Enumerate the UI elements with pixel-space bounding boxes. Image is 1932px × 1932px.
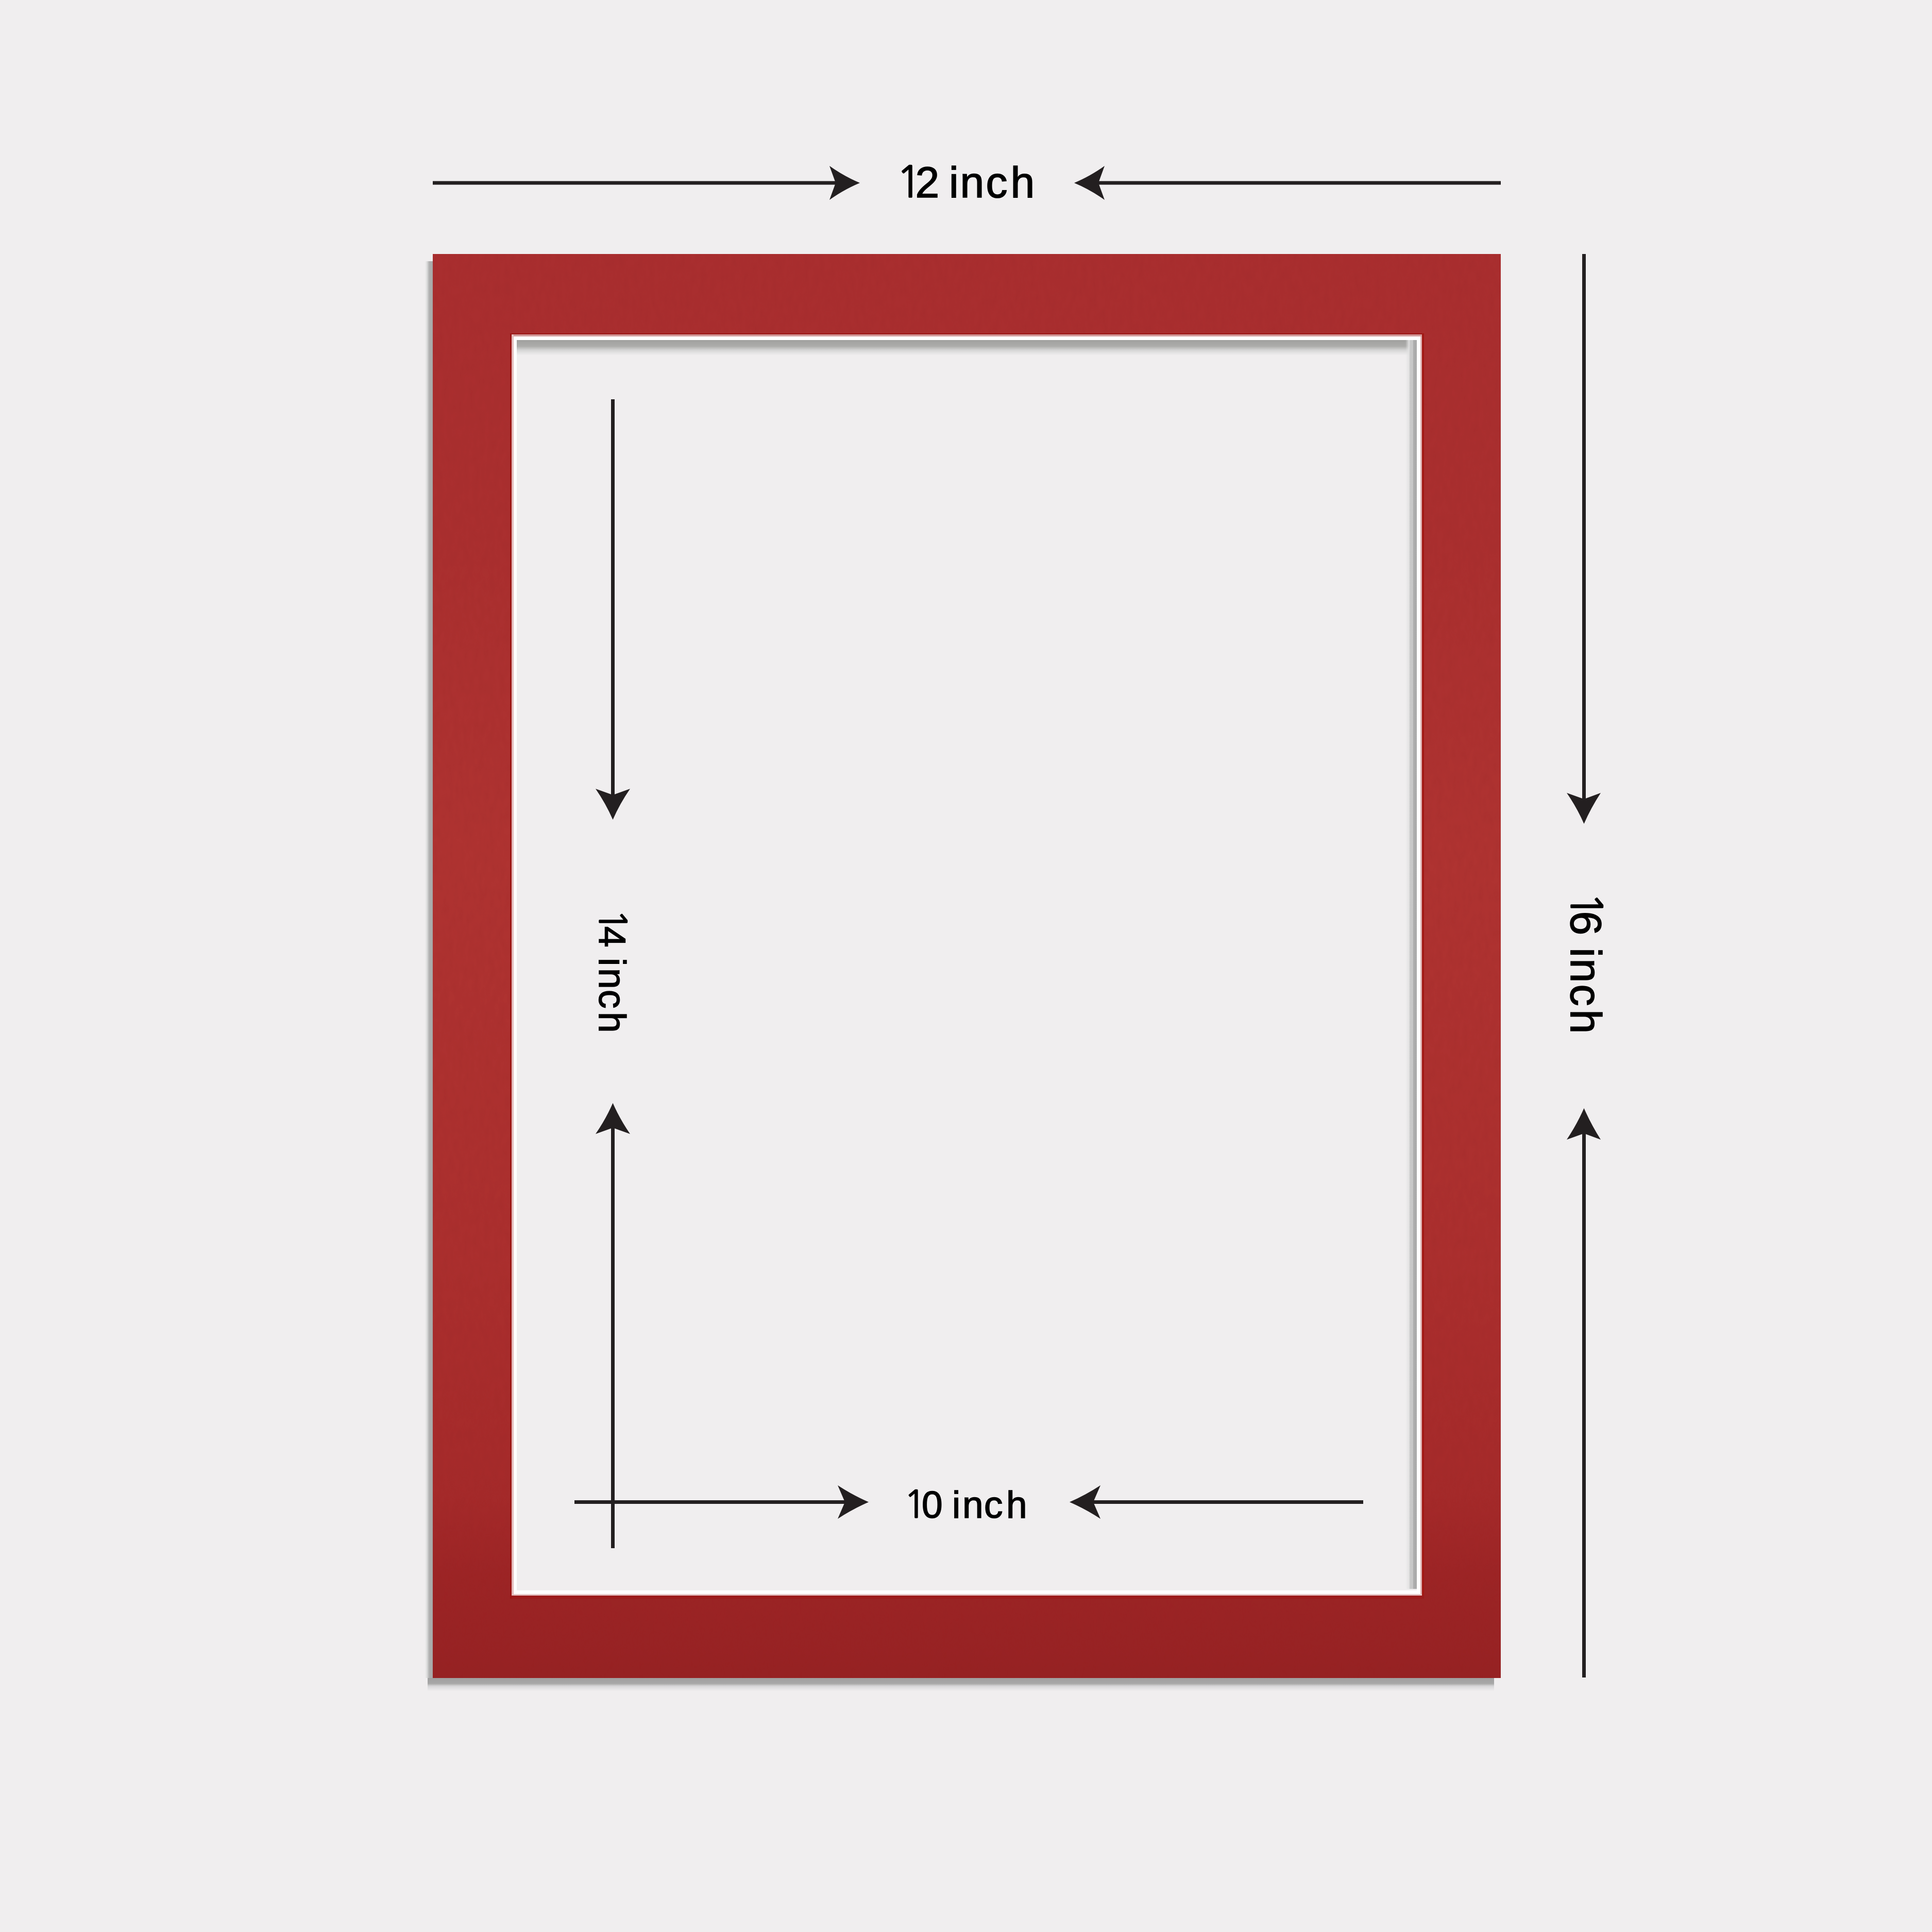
arrow: outer height bottom <box>1567 1108 1601 1677</box>
mat texture <box>433 254 1501 1678</box>
label: 10 inch: 10 inch <box>904 1484 1027 1526</box>
arrow: outer width left <box>433 166 860 200</box>
arrow: inner height top <box>596 399 630 820</box>
label: 12 inch: 12 inch <box>896 158 1035 207</box>
inner window opening <box>510 333 1424 1599</box>
label: 16 inch: 16 inch <box>1562 892 1610 1033</box>
arrow: outer width right <box>1074 166 1501 200</box>
frame drop shadow <box>425 261 1494 1691</box>
arrow: inner width right <box>1070 1485 1363 1519</box>
inner top shadow <box>517 340 1417 355</box>
inner right shadow <box>1405 340 1417 1589</box>
panel: red mat frame <box>425 254 1501 1691</box>
mat board <box>433 254 1501 1678</box>
arrow: outer height top <box>1567 254 1601 824</box>
arrow: inner width left <box>574 1485 869 1519</box>
label: 14 inch: 14 inch <box>591 909 633 1033</box>
arrow: inner height bottom <box>596 1103 630 1548</box>
